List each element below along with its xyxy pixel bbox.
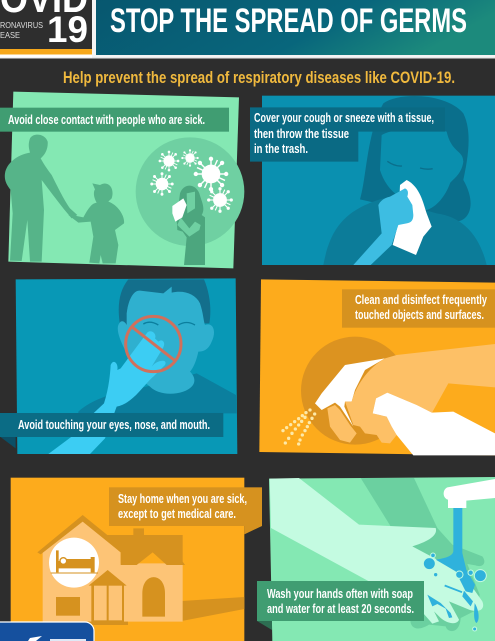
- house: [37, 515, 185, 625]
- hand: [48, 331, 166, 454]
- panel: wash hands: Wash your hands often with soap: [267, 586, 413, 601]
- prohibition sign: [126, 316, 181, 372]
- logo badge: [0, 622, 94, 641]
- panel: clean and disinfect: [259, 279, 495, 455]
- tissue: [393, 180, 432, 255]
- faucet: [444, 479, 495, 508]
- panel: cover your cough: then throw the tissue: [254, 126, 349, 141]
- label: [257, 581, 424, 630]
- path from door: [182, 597, 244, 621]
- panel: stay home: except to get medical care.: [118, 506, 236, 521]
- header teal panel: [96, 0, 495, 55]
- hair: [360, 96, 471, 222]
- panel: avoid touching face: Avoid touching your eyes, nose, and mouth.: [18, 417, 210, 432]
- label: [250, 107, 445, 171]
- hair: [119, 279, 210, 325]
- shirt: [78, 373, 237, 413]
- panel: stay home: Stay home when you are sick,: [118, 491, 247, 506]
- back hand: [361, 478, 484, 631]
- figure: sick woman: [172, 186, 205, 265]
- panel: wash hands: [257, 477, 495, 641]
- face: [118, 287, 214, 394]
- hand: [345, 344, 495, 443]
- spray bottle head: [315, 358, 385, 427]
- panel: cover your cough: in the trash.: [254, 141, 308, 156]
- header band: [0, 0, 495, 58]
- spray dots: [281, 408, 316, 446]
- label: [0, 108, 229, 140]
- spray bottle body: [373, 393, 495, 455]
- panel: avoid touching face: [0, 278, 237, 454]
- COVID-19 badge: [0, 0, 92, 58]
- finger: [327, 405, 357, 443]
- panel: wash hands: and water for at least 20 seconds.: [267, 601, 414, 616]
- label: [0, 413, 223, 448]
- front hand: [270, 478, 483, 624]
- panel: stay home: [0, 478, 262, 641]
- COVID-19 badge: 19: [47, 9, 88, 50]
- label: [342, 289, 495, 328]
- panel: cover your cough: [250, 96, 495, 265]
- figure: adult: [5, 135, 77, 262]
- hand: [353, 188, 413, 265]
- figure: child: [68, 183, 124, 263]
- COVID-19 badge: EASE: [0, 30, 20, 40]
- label: [109, 487, 262, 534]
- COVID-19 badge: RONAVIRUS: [0, 20, 43, 30]
- circle: [301, 337, 409, 445]
- panel: avoid close contact: [0, 92, 244, 268]
- body: [323, 198, 487, 265]
- face: [380, 128, 463, 210]
- water: [423, 508, 486, 631]
- panel: avoid close contact: Avoid close contact with people who are sick.: [8, 112, 205, 127]
- sick person circle: [136, 137, 244, 246]
